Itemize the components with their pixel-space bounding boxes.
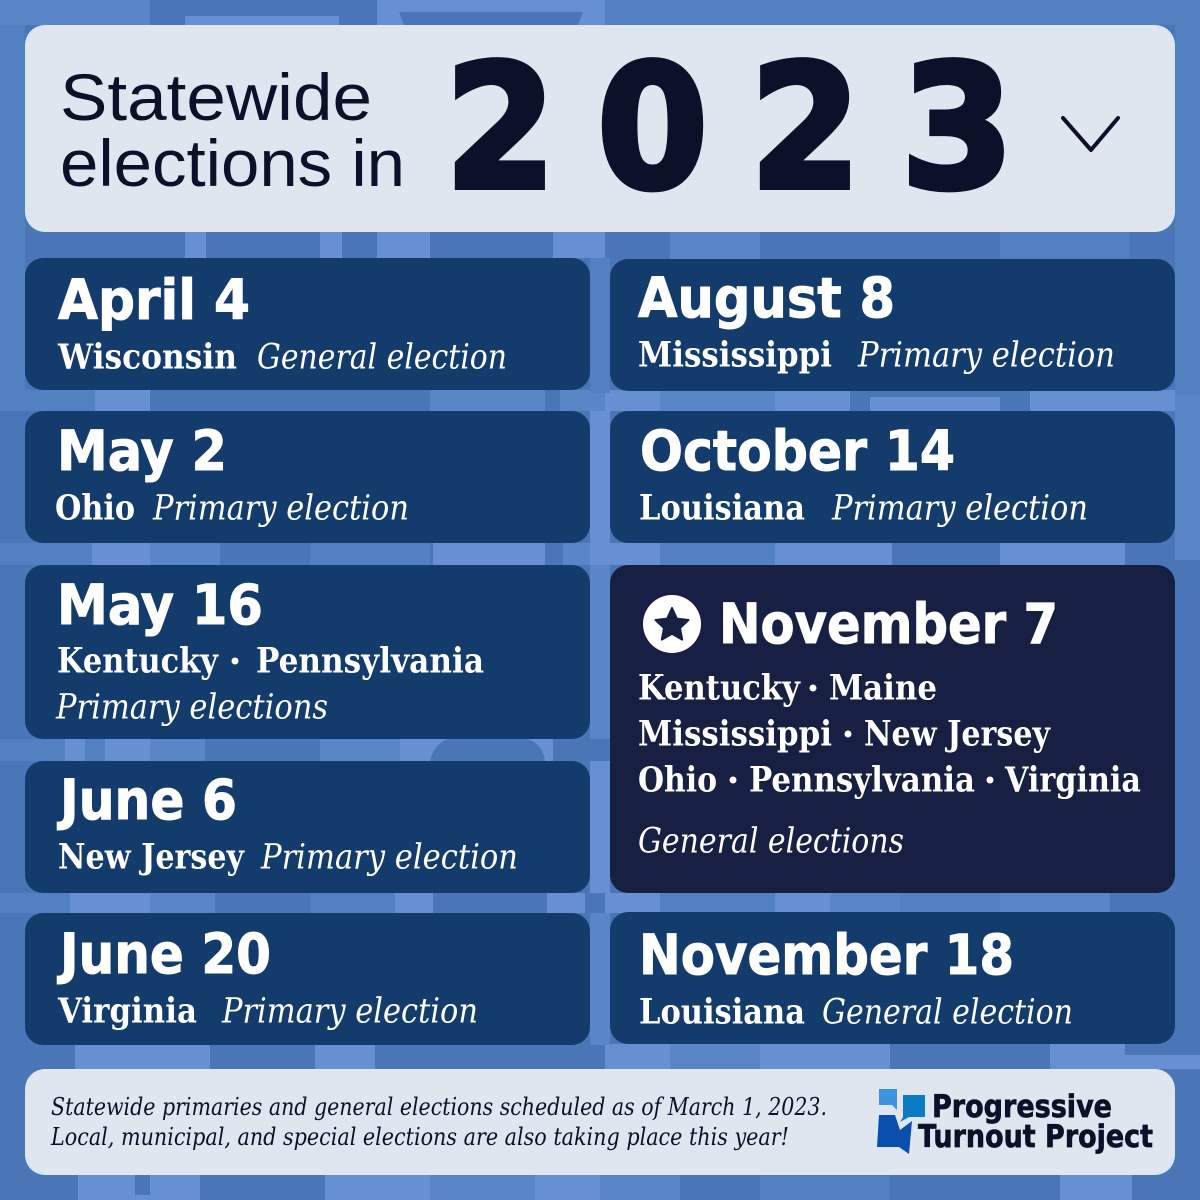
- icon: chevron down: [1063, 118, 1118, 150]
- panel: August 8: Mississippi: [638, 334, 832, 376]
- panel: November 18: General election: [822, 992, 1073, 1032]
- heading: statewide elections in: Statewide: [60, 60, 372, 134]
- heading: year 2023: 2: [750, 29, 861, 228]
- panel: November 7: General elections: [638, 822, 904, 862]
- panel: title header: [25, 25, 1175, 232]
- panel: June 20: Virginia: [57, 990, 197, 1032]
- panel: May 16: Primary elections: [55, 688, 328, 728]
- panel: April 4: Wisconsin: [57, 336, 237, 378]
- footnote text: Local, municipal, and special elections are also taking place this year!: [50, 1123, 789, 1151]
- heading: year 2023: 2: [445, 29, 556, 228]
- heading: year 2023: [445, 29, 1014, 228]
- panel: November 18: November 18: [639, 923, 1014, 987]
- panel: May 2: Primary election: [152, 488, 409, 528]
- panel: October 14: [610, 411, 1175, 543]
- panel: June 6: New Jersey: [58, 836, 245, 878]
- panel: November 7: Ohio: [638, 760, 717, 800]
- panel: November 18: Louisiana: [639, 992, 805, 1032]
- logo: Progressive Turnout Project: Turnout Project: [918, 1119, 1153, 1155]
- panel: footer: [25, 1069, 1175, 1175]
- panel: August 8: [610, 259, 1175, 391]
- panel: May 2: [25, 411, 590, 543]
- panel: November 7: New Jersey: [864, 714, 1051, 754]
- panel: November 7: Mississippi: [638, 714, 832, 754]
- panel: June 6: [25, 761, 590, 893]
- footnote text: [50, 1093, 827, 1151]
- panel: May 2: Ohio: [55, 488, 135, 528]
- panel: June 20: June 20: [56, 922, 271, 986]
- panel: November 7: Virginia: [1004, 760, 1141, 800]
- panel: June 6: June 6: [56, 768, 237, 832]
- footnote text: Statewide primaries and general elections scheduled as of March 1, 2023.: [51, 1093, 827, 1121]
- panel: June 6: Primary election: [260, 838, 518, 878]
- panel: October 14: Primary election: [831, 488, 1088, 528]
- panel: November 7: [610, 565, 1175, 893]
- logo: Progressive Turnout Project: [877, 1089, 1153, 1155]
- heading: year 2023: 3: [901, 29, 1014, 228]
- panel: May 16: Pennsylvania: [256, 640, 484, 682]
- panel: November 7: Maine: [829, 668, 937, 708]
- panel: June 20: Primary election: [221, 992, 478, 1032]
- heading: year 2023: 0: [597, 29, 708, 228]
- panel: May 16: Kentucky: [57, 640, 219, 682]
- panel: April 4: April 4: [58, 268, 250, 332]
- panel: November 7: Kentucky: [638, 668, 801, 708]
- panel: October 14: October 14: [640, 419, 955, 483]
- panel: June 20: [25, 913, 590, 1045]
- panel: May 2: May 2: [57, 419, 227, 483]
- panel: April 4: [25, 258, 590, 390]
- panel: April 4: General election: [257, 338, 507, 378]
- heading: statewide elections in: elections in: [60, 126, 405, 200]
- panel: October 14: Louisiana: [639, 488, 805, 528]
- icon: star in circle: [643, 595, 701, 653]
- panel: November 7: Pennsylvania: [749, 760, 975, 800]
- panel: August 8: Primary election: [857, 336, 1115, 376]
- heading: statewide elections in: [60, 60, 405, 200]
- panel: November 18: [610, 912, 1175, 1044]
- panel: May 16: May 16: [57, 573, 263, 637]
- panel: August 8: August 8: [638, 266, 895, 330]
- panel: May 16: [25, 565, 590, 739]
- panel: November 7: November 7: [719, 592, 1058, 656]
- logo: Progressive Turnout Project: Progressive: [932, 1089, 1112, 1125]
